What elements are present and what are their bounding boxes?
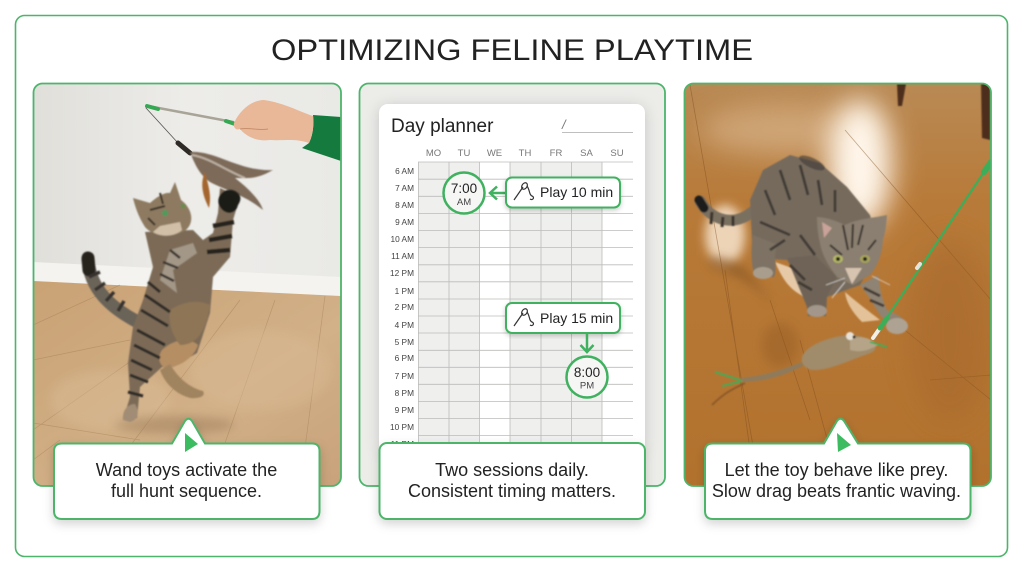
time labels: 9 AM — [395, 217, 414, 227]
8:00 PM circle — [566, 356, 608, 398]
head — [817, 215, 887, 285]
7:00 AM circle: AM — [457, 197, 471, 208]
reaching leg — [860, 274, 904, 322]
time labels: 7 PM — [395, 371, 414, 381]
furniture legs — [897, 84, 990, 140]
icon: cursor — [837, 433, 851, 452]
icon: cursor — [185, 433, 198, 452]
callout: prey behaviour — [705, 419, 970, 519]
wooden floor — [684, 83, 991, 486]
arrow to 8:00 — [580, 334, 594, 352]
rear leg — [160, 364, 204, 398]
weekday labels — [426, 148, 624, 159]
time labels: 5 PM — [395, 337, 414, 347]
weekday labels: TU — [458, 148, 470, 159]
hand and sleeve — [234, 100, 341, 161]
time labels: 6 PM — [395, 353, 414, 363]
weekday labels: SU — [610, 148, 624, 159]
planner heading: Day planner — [391, 116, 494, 137]
time labels: 12 PM — [390, 268, 414, 278]
title: OPTIMIZING FELINE PLAYTIME — [271, 34, 753, 67]
Play 15 min pill: Play 15 min — [540, 310, 613, 326]
mid front leg — [790, 262, 828, 317]
7:00 AM circle — [444, 172, 484, 214]
callout: wand toys: Wand toys activate the — [96, 460, 277, 480]
time labels: 11 PM — [391, 439, 414, 449]
dark stripes — [760, 165, 884, 306]
time labels: 10 AM — [390, 234, 414, 244]
callout: two sessions: Two sessions daily. — [435, 460, 589, 480]
wall — [33, 83, 341, 283]
wood floor — [33, 281, 341, 486]
time labels: 1 PM — [395, 286, 414, 296]
raised arm — [218, 190, 240, 213]
callout: wand toys: full hunt sequence. — [111, 481, 262, 501]
tail — [88, 259, 136, 321]
callout: two sessions — [380, 443, 645, 519]
body stripes — [128, 282, 170, 396]
Play 10 min pill: Play 10 min — [540, 184, 613, 200]
time labels: 9 PM — [395, 405, 414, 415]
body — [123, 188, 240, 420]
weekday labels: FR — [550, 148, 562, 159]
time labels: 8 PM — [395, 388, 414, 398]
date field: / — [561, 117, 567, 132]
rear leg — [751, 242, 776, 278]
Play 10 min pill — [506, 178, 620, 208]
panel: prey toy photo — [684, 83, 991, 486]
jumping tabby cat — [88, 182, 240, 422]
icon: wand toy — [514, 308, 533, 326]
feather toy — [190, 152, 273, 210]
8:00 PM circle: 8:00 — [574, 365, 600, 380]
time labels: 11 AM — [391, 251, 414, 261]
toy mouse — [712, 332, 887, 405]
date field — [561, 117, 633, 132]
evening session marker — [506, 303, 620, 398]
time labels: 10 PM — [390, 422, 414, 432]
head — [133, 182, 191, 236]
time labels: 8 AM — [395, 200, 414, 210]
time labels — [390, 166, 414, 449]
callout: prey behaviour: Slow drag beats frantic waving. — [712, 481, 961, 501]
callout: wand toys — [54, 419, 320, 519]
schedule grid — [418, 162, 633, 452]
tail — [699, 200, 752, 227]
day planner card — [379, 104, 645, 452]
time labels: 2 PM — [395, 302, 414, 312]
time labels: 6 AM — [395, 166, 414, 176]
panel: wand toy photo — [33, 83, 341, 486]
time labels: 4 PM — [395, 320, 414, 330]
time labels: 7 AM — [395, 183, 414, 193]
eyes — [833, 255, 843, 263]
stalking tabby cat — [750, 153, 908, 334]
weekday labels: TH — [519, 148, 531, 159]
belly — [159, 340, 198, 368]
weekday labels: MO — [426, 148, 441, 159]
wand with string — [146, 106, 235, 153]
weekday labels: SA — [580, 148, 593, 159]
paws — [753, 267, 773, 279]
baseboard — [33, 262, 341, 296]
7:00 AM circle: 7:00 — [451, 181, 477, 196]
morning session marker — [444, 172, 620, 214]
front arm — [160, 243, 197, 293]
weekday labels: WE — [487, 148, 502, 159]
green wand — [873, 162, 991, 338]
panel: planner background — [359, 83, 665, 486]
callout: prey behaviour: Let the toy behave like prey. — [725, 460, 948, 480]
eyes — [162, 210, 168, 216]
rear foot — [123, 404, 138, 422]
arrow to 7:00 — [490, 186, 507, 200]
icon: wand toy — [514, 182, 533, 200]
callout: two sessions: Consistent timing matters. — [408, 481, 616, 501]
8:00 PM circle: PM — [580, 380, 594, 392]
